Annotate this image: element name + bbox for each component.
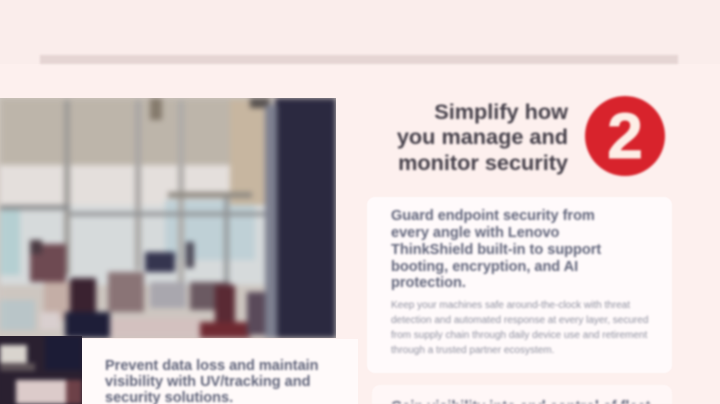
divider band (40, 55, 678, 64)
icon: number 2 badge: 2 (607, 100, 643, 172)
card text: endpoint security: protection. (391, 275, 466, 291)
card text: endpoint security: booting, encryption, and AI (391, 259, 578, 275)
photo lower left continuation (0, 336, 82, 404)
left card text: visibility with UV/tracking and (105, 374, 310, 390)
heading (396, 99, 570, 176)
people (30, 244, 66, 282)
card: endpoint security (367, 197, 672, 373)
card: second feature (372, 385, 672, 404)
card text: endpoint security: Guard endpoint security from (391, 208, 595, 224)
card text: endpoint security: through a trusted partner ecosystem. (391, 345, 554, 356)
curtain shading (275, 98, 345, 343)
card text: endpoint security: Keep your machines safe around-the-clock with threat (391, 300, 630, 311)
left card text (104, 358, 320, 404)
card text: endpoint security (390, 208, 650, 356)
icon: number 2 badge (585, 96, 665, 176)
heading: monitor security (398, 150, 568, 175)
card text: endpoint security: detection and automated response at every layer, secured (391, 315, 648, 326)
card text: endpoint security: every angle with Lenovo (391, 225, 559, 241)
photo: office meeting (0, 98, 336, 338)
heading: you manage and (397, 124, 568, 149)
card: left text panel (82, 339, 358, 404)
card text: endpoint security: from supply chain through daily device use and retirement (391, 330, 647, 341)
left card text: Prevent data loss and maintain (105, 358, 319, 374)
card text: endpoint security: ThinkShield built-in to support (391, 242, 601, 258)
heading: Simplify how (434, 99, 568, 124)
